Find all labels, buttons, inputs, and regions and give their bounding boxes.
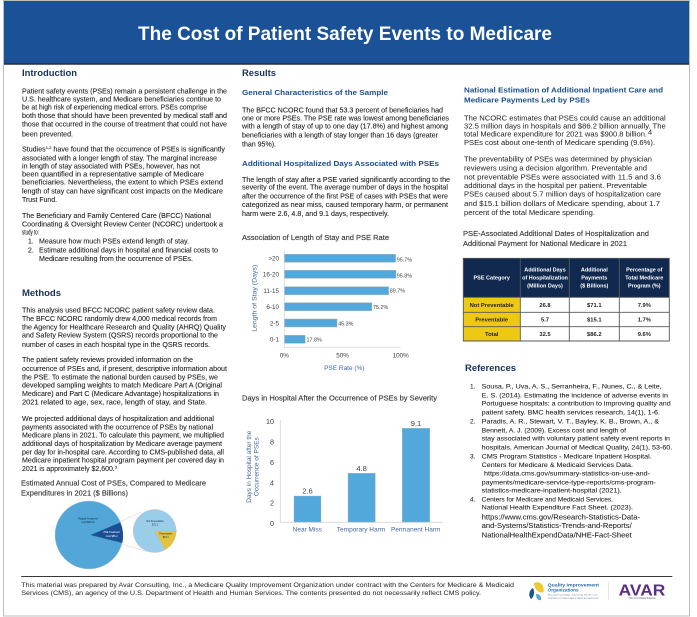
- footer disclaimer: This material was prepared by Avar Consulting, Inc., a Medicare Quality Improvement Organization under contract with the Centers for Medicare & Medicaid: [21, 582, 514, 589]
- table header text: Total Medicare: [625, 275, 663, 281]
- text block: additional hospitalized days: [242, 177, 450, 218]
- text block: reference list: CMS Program Statistics - Medicare Inpatient Hospital.: [482, 453, 652, 460]
- text block: methods paragraphs: The BFCC NCORC randomly drew 4,000 medical records from: [22, 316, 217, 323]
- y axis ticks: 0: [270, 519, 274, 528]
- text block: methods paragraphs: Medicare plans in 2021. To calculate this payment, we multiplied: [22, 433, 224, 440]
- text block: national estimation: additional days in the hospital per patient. Preventable: [464, 181, 647, 190]
- text block: national estimation: total Medicare expenditure for 2021 was $900.8 billion.: [464, 129, 647, 138]
- chart heading: Association of Length of Stay and PSE Rate: [242, 233, 389, 242]
- main pie: Cost $814.6: [82, 521, 95, 524]
- panel: methods: [22, 288, 227, 473]
- text block: introduction paragraphs: 2.: [28, 248, 34, 255]
- text block: methods paragraphs: The patient safety reviews provided information on the: [22, 357, 193, 364]
- category labels: >20: [268, 256, 279, 263]
- column chart: days in hospital by severity: [242, 393, 443, 534]
- table header text: of Hospitalization: [522, 275, 569, 281]
- text block: reference list: Sousa, P., Uva, A. S., Serranheira, F., Nunes, C., & Leite,: [482, 384, 662, 391]
- text block: methods paragraphs: number of cases in each hospital type in the QSRS records.: [22, 342, 210, 349]
- category labels: [263, 256, 279, 344]
- table header text: Additional: [581, 267, 608, 273]
- text block: national estimation: not preventable PSEs were associated with 11.5 and 3.6: [464, 172, 661, 181]
- text block: introduction paragraphs: have found that the occurrence of PSEs is significantly: [51, 146, 226, 153]
- panel: results: [241, 68, 450, 218]
- text block: introduction paragraphs: in length of stay associated with PSEs, however, has not: [22, 164, 200, 171]
- table heading: [463, 229, 649, 248]
- main pie: Regular Treatment: [78, 518, 98, 520]
- logo: AVAR: AVAR: [619, 582, 666, 599]
- breakout pie: Not Preventable: [146, 520, 164, 523]
- bars: [285, 254, 396, 343]
- axes: [284, 250, 401, 347]
- heading: results: Results: [242, 68, 276, 79]
- text block: introduction paragraphs: Trust Fund.: [22, 197, 57, 204]
- text block: methods paragraphs: developed sampling weights to match Medicare Part A (Original: [22, 382, 222, 389]
- table body text: 32.5: [539, 332, 551, 338]
- y axis ticks: 2: [270, 499, 274, 508]
- text block: introduction paragraphs: be at high risk of experiencing medical errors. PSEs comprise: [22, 105, 207, 112]
- table body text: 9.6%: [638, 332, 651, 338]
- text block: additional hospitalized days: severity of the event. The average number of days in the hospital: [242, 185, 448, 192]
- table header text: Payments: [581, 275, 607, 281]
- subheading: general characteristics: General Characteristics of the Sample: [242, 88, 388, 97]
- text block: methods paragraphs: the PSE. To estimate the national burden caused by PSEs, we: [22, 374, 218, 381]
- text block: national estimation: PSEs cost about one-tenth of Medicare spending (9.6%).: [464, 138, 655, 147]
- text block: introduction paragraphs: 1.: [28, 239, 34, 246]
- breakout pie: Preventable: [159, 532, 173, 535]
- subheading: national estimation: Medicare Payments Led by PSEs: [464, 96, 590, 105]
- category labels: Temporary Harm: [337, 527, 385, 534]
- table header text: Percentage of: [626, 267, 663, 273]
- text block: introduction paragraphs: Estimate additional days in hospital and financial costs to: [39, 248, 218, 255]
- text block: methods paragraphs: additional days of hospitalization by Medicare average payment: [22, 441, 222, 448]
- text block: introduction paragraphs: study to:: [22, 230, 39, 237]
- text block: introduction paragraphs: beneficiaries. Nevertheless, the extent to which PSEs extend: [22, 180, 223, 187]
- logo: AVAR: The Art of Data Science: [628, 596, 656, 600]
- value labels: 95.8%: [397, 274, 412, 280]
- text block: national estimation: PSEs caused about 5.7 million days of hospitalization care: [464, 190, 661, 199]
- text block: reference list: 1.: [470, 384, 476, 391]
- text block: reference list: statistics-medicare-inpatient-hospital (2021).: [482, 488, 622, 495]
- table header text: Additional Days: [524, 267, 566, 273]
- footer: [21, 576, 672, 600]
- text block: methods paragraphs: Medicare inpatient hospital program payment per covered day in: [22, 458, 224, 465]
- panel: table: [463, 229, 669, 341]
- value labels: [302, 419, 421, 496]
- chart heading: Days in Hospital After the Occurrence of PSEs by Severity: [242, 393, 437, 402]
- text block: additional hospitalized days: harm were 2.6, 4.8, and 9.1 days, respectively.: [242, 211, 389, 218]
- text block: introduction paragraphs: U.S. healthcare system, and Medicare beneficiaries continue to: [22, 97, 221, 104]
- columns: [294, 428, 430, 522]
- value labels: 45.3%: [338, 321, 354, 327]
- subheading: additional hospitalized days: Additional Hospitalized Days Associated with PSEs: [242, 159, 439, 168]
- y axis ticks: 6: [270, 458, 274, 467]
- value labels: 4.8: [356, 464, 367, 473]
- main pie: Cost $86.2: [106, 535, 118, 538]
- value labels: 17.8%: [306, 338, 322, 344]
- table body text: Not Preventable: [470, 303, 515, 309]
- text block: general characteristics: with a length of stay of up to one day (17.8%) and highest among: [241, 124, 448, 131]
- panel: national estimation: [464, 86, 666, 217]
- text block: additional hospitalized days: after the occurrence of the first PSE of cases with PSEs that were: [242, 194, 448, 201]
- table body text: 5.7: [541, 317, 549, 323]
- table body text: $71.1: [587, 303, 602, 309]
- value labels: 95.7%: [397, 258, 412, 264]
- value labels: 75.2%: [373, 305, 388, 311]
- table body text: $15.1: [587, 317, 602, 323]
- text block: reference list: and-Systems/Statistics-Trends-and-Reports/: [482, 521, 633, 530]
- text block: general characteristics: than 95%).: [242, 142, 276, 149]
- category labels: Permanent Harm: [391, 527, 440, 534]
- text block: reference list: E. S. (2014). Estimating the incidence of adverse events in: [482, 392, 668, 399]
- y axis title: Occurrence of PSEs: [254, 437, 260, 496]
- x axis ticks: 0%: [280, 352, 289, 360]
- text block: reference list: 4.: [470, 496, 476, 503]
- table fills: [463, 258, 669, 341]
- text block: national estimation: 4: [648, 128, 652, 136]
- logo: quality improvement organizations: Organizations: [548, 588, 579, 592]
- text block: national estimation: 32.5 million days in hospitals and $86.2 billion annually. The: [464, 121, 666, 130]
- y axis title: Length of Stay (Days): [252, 265, 258, 332]
- text block: methods paragraphs: Medicare) and Part C (Medicare Advantage) hospitalizations in: [22, 391, 219, 398]
- text block: methods paragraphs: occurrence of PSEs and, if present, descriptive information about: [22, 366, 227, 373]
- text block: general characteristics: one or more PSEs. The PSE rate was lowest among beneficiaries: [242, 115, 450, 122]
- table body text: Total: [485, 332, 499, 338]
- text block: national estimation: The NCORC estimates that PSEs could cause an additional: [464, 113, 666, 122]
- logo: quality improvement organizations: [529, 582, 600, 600]
- text block: introduction paragraphs: [22, 89, 227, 263]
- table grid: [463, 258, 669, 341]
- text block: introduction paragraphs: length of stay can have significant cost impacts on the Medicare: [22, 188, 223, 195]
- text block: reference list: Portuguese hospitals: a contribution to improving quality and: [482, 401, 671, 408]
- logo: quality improvement organizations: Quality Improvement: [548, 582, 600, 588]
- value labels: 9.1: [411, 419, 421, 428]
- text block: reference list: patient safety. BMC health services research, 14(1), 1-6.: [482, 410, 660, 417]
- subheading: national estimation: National Estimation of Additional Inpatient Care and: [464, 86, 664, 95]
- text block: introduction paragraphs: 1,2: [46, 145, 52, 150]
- category labels: 2-5: [270, 320, 279, 327]
- text block: methods paragraphs: We projected additional days of hospitalization and additional: [22, 416, 214, 423]
- y axis title: [247, 430, 260, 503]
- category labels: 0-1: [270, 337, 279, 344]
- table body text: Preventable: [475, 317, 509, 323]
- text block: introduction paragraphs: Coordinating & Oversight Review Center (NCORC) undertook a: [22, 222, 223, 229]
- text block: reference list: [470, 384, 672, 539]
- text block: methods paragraphs: and Safety Review System (QSRS) records proportional to the: [22, 333, 218, 340]
- text block: introduction paragraphs: been quantified in a representative sample of Medicare: [22, 172, 204, 179]
- text block: additional hospitalized days: categorized as near miss, caused temporary harm, or permanent: [242, 202, 448, 209]
- text block: reference list: Centers for Medicare and Medicaid Services.: [482, 496, 613, 503]
- text block: general characteristics: beneficiaries with a length of stay longer than 16 days (greater: [242, 133, 439, 140]
- text block: national estimation: reviewers using a decision algorithm. Preventable and: [464, 164, 647, 173]
- table heading: PSE-Associated Additional Dates of Hospitalization and: [463, 229, 649, 238]
- table body text: [470, 303, 651, 338]
- category labels: 6-10: [266, 304, 279, 311]
- heading: introduction: Introduction: [22, 68, 77, 79]
- table body text: 1.7%: [638, 317, 651, 323]
- title: The Cost of Patient Safety Events to Medicare: [138, 24, 552, 45]
- text block: national estimation: percent of the total Medicare spending.: [464, 208, 595, 217]
- subheading: national estimation: [464, 86, 664, 105]
- table body text: 7.9%: [638, 303, 651, 309]
- text block: methods paragraphs: payments associated with the occurrence of PSEs by national: [22, 424, 213, 431]
- text block: reference list: NationalHealthExpendData/NHE-Fact-Sheet: [482, 530, 632, 539]
- table header text: PSE Category: [474, 275, 511, 281]
- heading: methods: Methods: [22, 288, 61, 299]
- text block: reference list: stay associated with voluntary patient safety event reports in: [482, 436, 670, 443]
- value labels: 2.6: [302, 486, 313, 496]
- text block: reference list: Paradis, A. R., Stewart, V. T., Bayley, K. B., Brown, A., &: [482, 419, 660, 426]
- text block: introduction paragraphs: Measure how much PSEs extend length of stay.: [39, 239, 189, 246]
- breakout pie: $71.1: [152, 524, 159, 526]
- text block: introduction paragraphs: been prevented.: [22, 132, 73, 139]
- logo: quality improvement organizations: Sharing Knowledge. Improving Health Care.: [548, 594, 599, 596]
- text block: reference list: 3.: [470, 453, 476, 460]
- logo: quality improvement organizations: CENTERS FOR MEDICARE & MEDICAID SERVICES: [548, 597, 599, 600]
- text block: additional hospitalized days: The length of stay after a PSE varied significantly according to the: [242, 177, 450, 184]
- text block: reference list: 2.: [470, 419, 476, 426]
- x axis ticks: [280, 352, 409, 360]
- text block: methods paragraphs: This analysis used BFCC NCORC patient safety review data.: [22, 308, 215, 315]
- breakout pie: [133, 510, 176, 552]
- header banner: [4, 1, 689, 65]
- chart heading: [21, 478, 206, 498]
- table body text: $86.2: [587, 332, 602, 338]
- category labels: [293, 527, 440, 534]
- text block: introduction paragraphs: The Beneficiary and Family Centered Care (BFCC) National: [22, 213, 211, 220]
- x axis title: PSE Rate (%): [324, 365, 365, 372]
- chart heading: Estimated Annual Cost of PSEs, Compared to Medicare: [21, 478, 206, 488]
- text block: reference list: https://www.cms.gov/Research-Statistics-Data-: [482, 512, 641, 521]
- text block: reference list: Bennett, A. J. (2009). Excess cost and length of: [482, 427, 626, 434]
- breakout pie: $15.1: [163, 536, 169, 539]
- text block: introduction paragraphs: associated with a longer length of stay. The marginal increase: [22, 155, 217, 162]
- table header text: [474, 267, 663, 290]
- category labels: Near Miss: [293, 527, 323, 534]
- text block: reference list: Centers for Medicare & Medicaid Services Data.: [482, 462, 633, 469]
- main pie: [55, 501, 123, 569]
- footer disclaimer: [21, 582, 514, 597]
- panel: introduction: [22, 68, 227, 263]
- chart heading: Expenditures in 2021 ($ Billions): [21, 488, 128, 498]
- text block: general characteristics: The BFCC NCORC found that 53.3 percent of beneficiaries had: [242, 108, 443, 115]
- text block: methods paragraphs: 2021 related to age, sex, race, length of stay, and State.: [22, 399, 207, 406]
- text block: reference list: hospitals. American Journal of Medical Quality, 24(1), 53-60.: [482, 445, 672, 452]
- text block: reference list: payments/medicare-service-type-reports/cms-program-: [482, 479, 656, 486]
- text block: methods paragraphs: 2021 is approximately $2,600.: [22, 466, 114, 473]
- text block: reference list: National Health Expenditure Fact Sheet. (2023).: [482, 505, 633, 512]
- connector lines: [121, 512, 178, 552]
- y axis ticks: 10: [266, 417, 274, 426]
- category labels: 16-20: [263, 272, 279, 279]
- y axis ticks: 8: [270, 437, 274, 446]
- text block: national estimation: The preventability of PSEs was determined by physician: [464, 155, 652, 164]
- text block: introduction paragraphs: Medicare resulting from the occurrence of PSEs.: [39, 256, 193, 263]
- table heading: Additional Payment for National Medicare in 2021: [463, 239, 627, 248]
- value labels: [306, 258, 412, 344]
- bar chart: length of stay and PSE rate: [242, 233, 412, 372]
- table header text: Program (%): [628, 284, 661, 290]
- y axis title: Days in Hospital after the: [247, 430, 253, 503]
- text block: general characteristics: [241, 108, 450, 149]
- x axis ticks: 100%: [393, 352, 409, 360]
- table body text: 26.8: [539, 303, 551, 309]
- value labels: 89.7%: [390, 289, 405, 295]
- axes: [280, 420, 443, 522]
- heading: references: References: [465, 363, 516, 374]
- table header text: ($ Billions): [580, 284, 609, 290]
- y axis ticks: [266, 417, 274, 528]
- panel: annual cost pie chart: [21, 478, 206, 569]
- text block: methods paragraphs: [22, 308, 227, 473]
- main pie: PSE Treatment: [104, 531, 120, 534]
- text block: reference list: https://data.cms.gov/summary-statistics-on-use-and-: [484, 471, 650, 478]
- y axis ticks: 4: [270, 478, 274, 487]
- text block: national estimation: [464, 113, 666, 217]
- text block: introduction paragraphs: Patient safety events (PSEs) remain a persistent challenge in the: [22, 89, 227, 96]
- panel: references: [465, 363, 672, 539]
- text block: methods paragraphs: per day for in-hospital care. According to CMS-published data, all: [22, 449, 224, 456]
- text block: introduction paragraphs: Studies: [22, 146, 45, 153]
- table header text: (Million Days): [527, 284, 563, 290]
- text block: methods paragraphs: 3: [115, 464, 118, 470]
- x axis ticks: 50%: [336, 352, 349, 360]
- text block: introduction paragraphs: those that occurred in the course of treatment that could not have: [22, 122, 227, 129]
- text block: national estimation: and $15.1 billion dollars of Medicare spending, about 1.7: [464, 199, 660, 208]
- category labels: 11-15: [263, 288, 279, 295]
- text block: introduction paragraphs: both those that should have been prevented by medical staff and: [22, 113, 227, 120]
- footer disclaimer: Services (CMS), an agency of the U.S. Department of Health and Human Services. The contents presented do not necessarily reflect CMS policy.: [21, 590, 481, 597]
- text block: methods paragraphs: the Agency for Healthcare Research and Quality (AHRQ) Quality: [22, 324, 227, 331]
